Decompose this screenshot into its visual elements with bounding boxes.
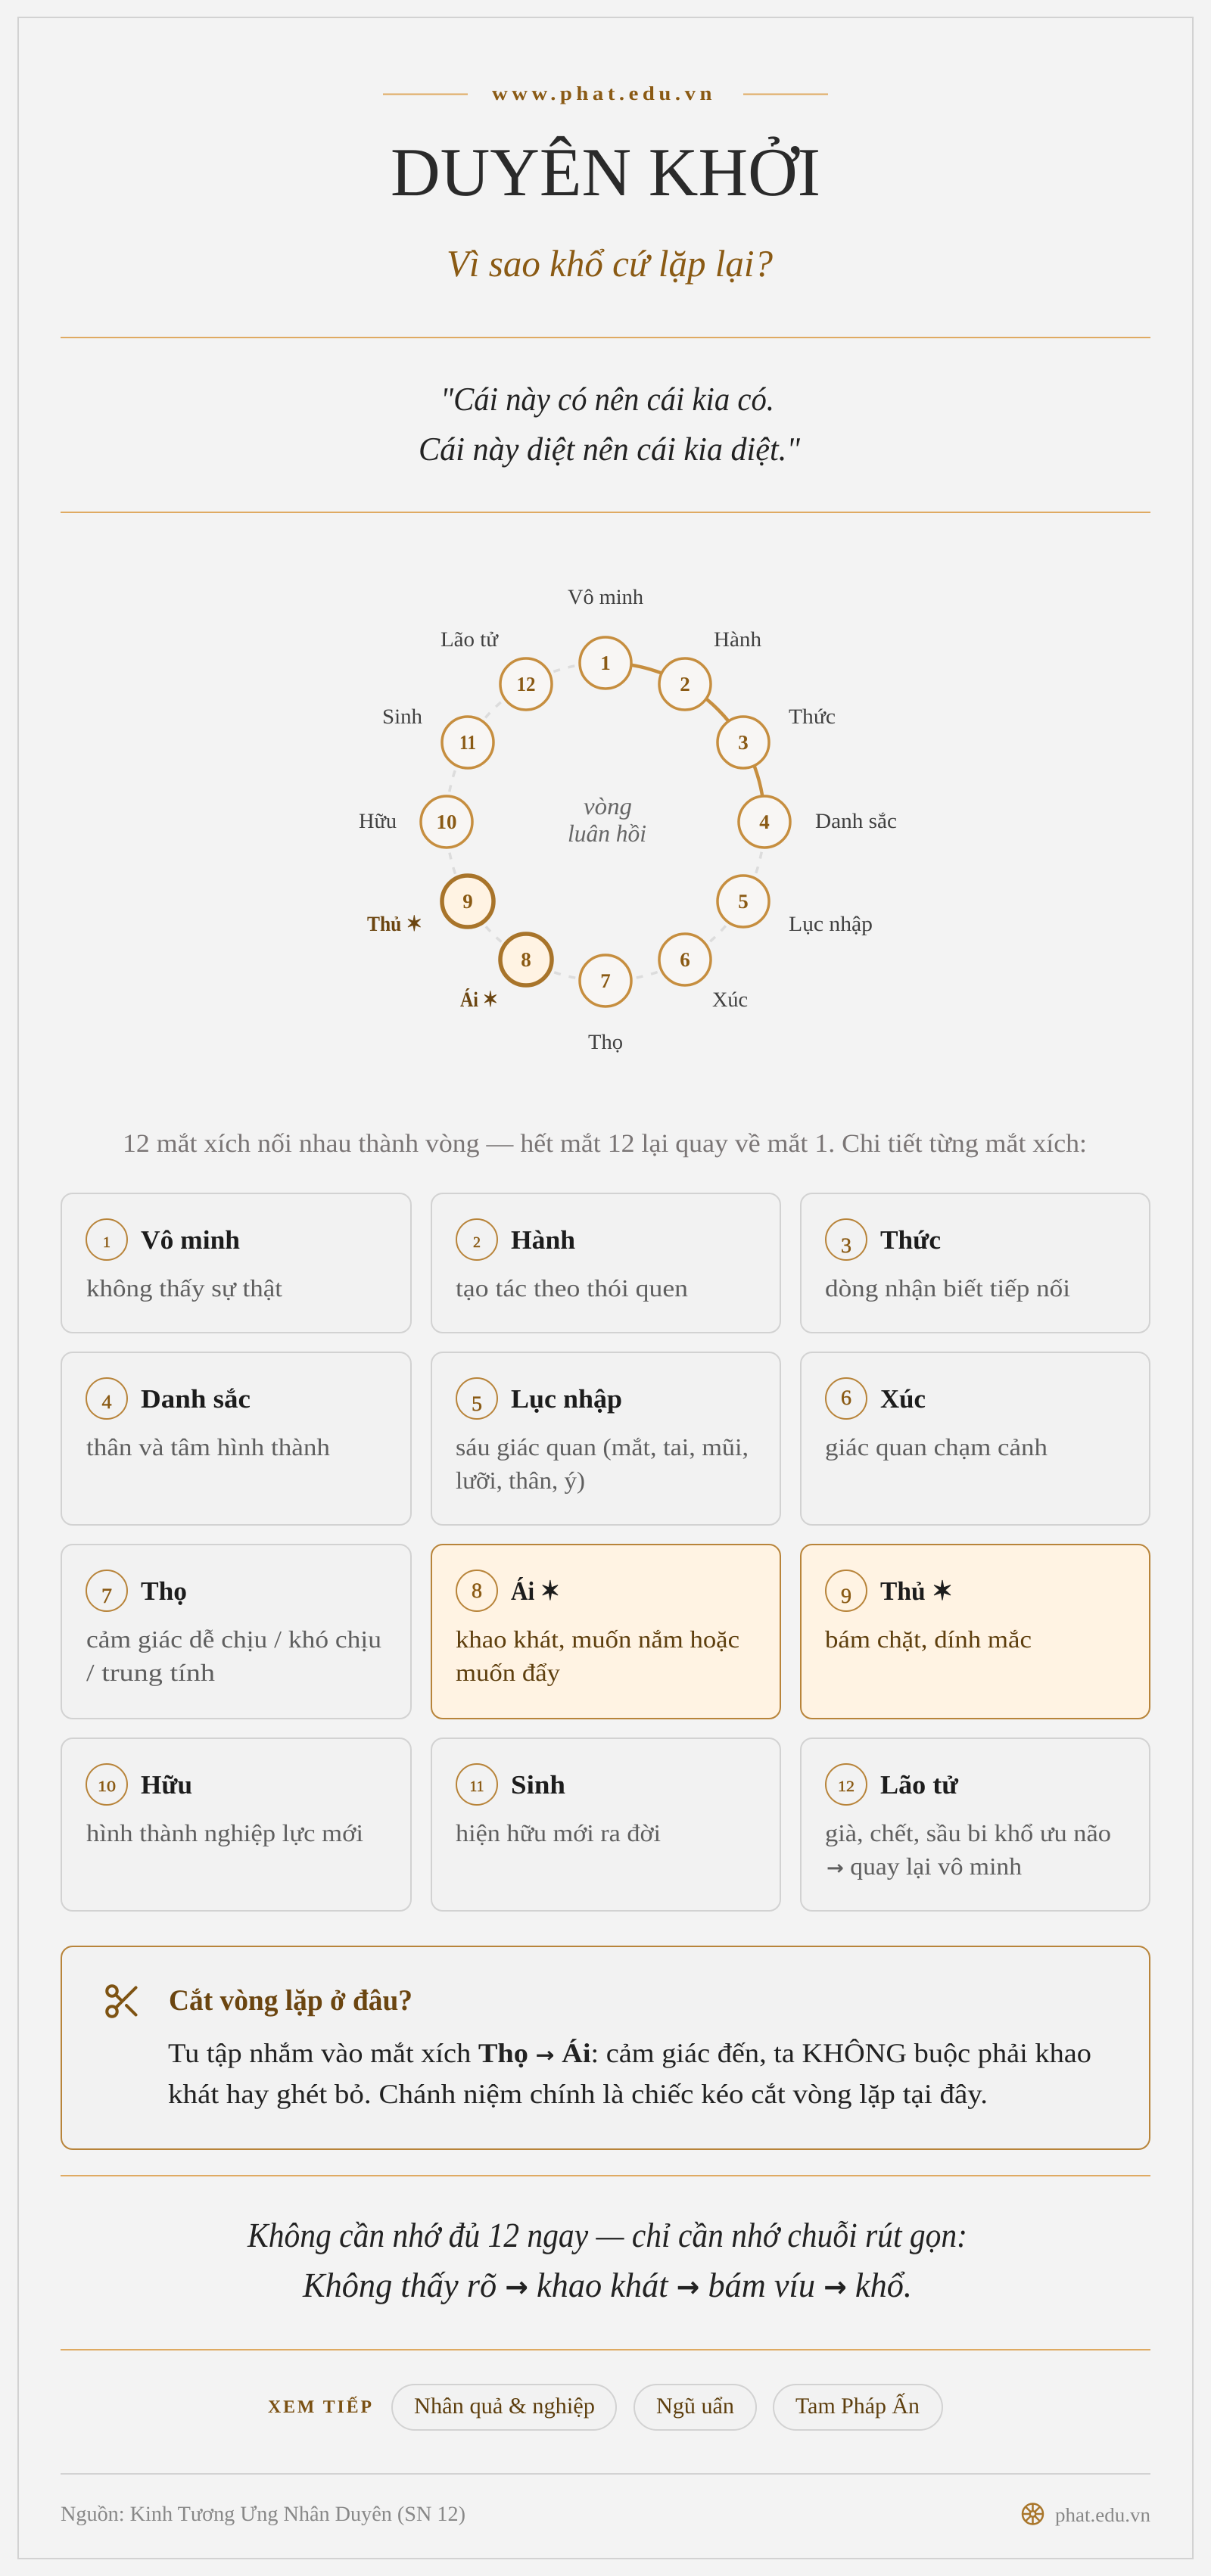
node 8 highlighted bbox=[500, 934, 552, 985]
node 2 bbox=[659, 658, 711, 710]
badge 10: 10 bbox=[98, 1778, 116, 1795]
callout body: khát hay ghét bỏ. Chánh niệm chính là chiếc kéo cắt vòng lặp tại đây. bbox=[168, 2079, 988, 2109]
source: Nguồn: Kinh Tương Ưng Nhân Duyên (SN 12) bbox=[61, 2503, 465, 2526]
label: Danh sắc: Danh sắc bbox=[815, 810, 897, 833]
card 7 description bbox=[86, 1626, 381, 1686]
pill: Tam Pháp Ấn: Tam Pháp Ấn bbox=[795, 2393, 920, 2419]
node 6 bbox=[659, 934, 711, 985]
card 11 bbox=[431, 1738, 780, 1911]
node 11: 11 bbox=[459, 731, 476, 754]
quote: "Cái này có nên cái kia có. bbox=[441, 381, 774, 418]
badge 2: 2 bbox=[473, 1234, 481, 1251]
callout body bbox=[168, 2038, 1091, 2109]
card 10 description: hình thành nghiệp lực mới bbox=[86, 1819, 363, 1846]
node 3 bbox=[718, 717, 769, 768]
card 4 bbox=[61, 1352, 411, 1525]
card 8 title: Ái ✶ bbox=[511, 1576, 560, 1606]
card 9 highlighted bbox=[801, 1545, 1150, 1719]
card 8 description bbox=[456, 1626, 739, 1686]
card 7 bbox=[61, 1545, 411, 1719]
badge 5: 5 bbox=[472, 1392, 482, 1416]
icon: dharma wheel bbox=[1023, 2503, 1043, 2525]
card 10 title: Hữu bbox=[141, 1770, 192, 1800]
summary: Không thấy rõ → khao khát → bám víu → khổ. bbox=[302, 2266, 912, 2304]
badge 6: 6 bbox=[841, 1386, 851, 1410]
card 6 bbox=[801, 1352, 1150, 1525]
card 10 bbox=[61, 1738, 411, 1911]
card 2 description: tạo tác theo thói quen bbox=[456, 1274, 688, 1302]
card 1 description: không thấy sự thật bbox=[86, 1274, 282, 1302]
card 1 title: Vô minh bbox=[141, 1225, 240, 1255]
card 11 title: Sinh bbox=[511, 1770, 565, 1800]
node 3: 3 bbox=[738, 731, 749, 754]
node 12: 12 bbox=[516, 673, 536, 695]
card 9 description: bám chặt, dính mắc bbox=[825, 1626, 1032, 1653]
card 6 description: giác quan chạm cảnh bbox=[825, 1433, 1048, 1461]
card 8 description: muốn đẩy bbox=[456, 1659, 560, 1686]
badge 1: 1 bbox=[103, 1234, 111, 1251]
ring centre text: vòng bbox=[584, 792, 632, 820]
badge 7: 7 bbox=[101, 1585, 112, 1608]
node 1 bbox=[580, 637, 631, 689]
callout heading: Cắt vòng lặp ở đâu? bbox=[169, 1984, 412, 2017]
node 10 bbox=[421, 796, 472, 848]
badge 3 bbox=[826, 1219, 867, 1260]
card 3 title: Thức bbox=[880, 1225, 941, 1255]
badge 9: 9 bbox=[841, 1585, 851, 1608]
label: Hành: Hành bbox=[714, 628, 761, 652]
pill: Nhân quả & nghiệp bbox=[392, 2385, 616, 2430]
pill: Ngũ uẩn bbox=[634, 2385, 756, 2430]
card 4 description: thân và tâm hình thành bbox=[86, 1433, 330, 1461]
quote: Cái này diệt nên cái kia diệt." bbox=[419, 431, 800, 468]
badge 4: 4 bbox=[101, 1391, 112, 1413]
card 7 description: / trung tính bbox=[86, 1659, 215, 1686]
card 9 title: Thủ ✶ bbox=[880, 1576, 953, 1606]
badge 4 bbox=[86, 1378, 127, 1419]
label: Ái: Ái ✶ bbox=[460, 988, 498, 1012]
card 12 bbox=[801, 1738, 1150, 1911]
callout body: Tu tập nhắm vào mắt xích Thọ → Ái: cảm giác đến, ta KHÔNG buộc phải khao bbox=[168, 2038, 1091, 2068]
card 8 highlighted bbox=[431, 1545, 780, 1719]
badge 7 bbox=[86, 1570, 127, 1611]
card 5 title: Lục nhập bbox=[511, 1384, 622, 1414]
card 5 description bbox=[456, 1433, 749, 1494]
label: Thủ: Thủ ✶ bbox=[367, 913, 422, 936]
node 8 highlighted: 8 bbox=[521, 948, 531, 971]
ring centre text bbox=[568, 792, 646, 847]
callout bbox=[61, 1946, 1150, 2149]
label: Thức: Thức bbox=[789, 705, 836, 729]
pill: Nhân quả & nghiệp: Nhân quả & nghiệp bbox=[414, 2394, 595, 2419]
label: Thọ: Thọ bbox=[588, 1031, 623, 1054]
card 12 description bbox=[825, 1819, 1111, 1880]
node 5: 5 bbox=[738, 890, 749, 913]
badge 2 bbox=[456, 1219, 497, 1260]
summary: Không cần nhớ đủ 12 ngay — chỉ cần nhớ chuỗi rút gọn: bbox=[247, 2216, 967, 2254]
ring diagram bbox=[359, 586, 897, 1054]
node 12 bbox=[500, 658, 552, 710]
card 12 title: Lão tử bbox=[880, 1770, 959, 1800]
card 12 description: → quay lại vô minh bbox=[827, 1853, 1022, 1880]
card 7 description: cảm giác dễ chịu / khó chịu bbox=[86, 1626, 381, 1653]
badge 10 bbox=[86, 1764, 127, 1805]
badge 1 bbox=[86, 1219, 127, 1260]
label: Vô minh: Vô minh bbox=[568, 586, 643, 609]
label: Xúc: Xúc bbox=[712, 988, 748, 1012]
label: Lục nhập: Lục nhập bbox=[789, 913, 873, 936]
footer site: phat.edu.vn bbox=[1055, 2504, 1150, 2526]
card 11 description: hiện hữu mới ra đời bbox=[456, 1819, 661, 1846]
card 12 description: già, chết, sầu bi khổ ưu não bbox=[825, 1819, 1111, 1846]
badge 9 bbox=[826, 1570, 867, 1611]
node 4 bbox=[739, 796, 790, 848]
card 1 bbox=[61, 1193, 411, 1333]
title: DUYÊN KHỞI bbox=[391, 134, 820, 210]
intro line: 12 mắt xích nối nhau thành vòng — hết mắt 12 lại quay về mắt 1. Chi tiết từng mắt xích: bbox=[123, 1130, 1087, 1158]
badge 8: 8 bbox=[472, 1579, 482, 1603]
icon: scissors bbox=[107, 1986, 136, 2017]
card 2 bbox=[431, 1193, 780, 1333]
see more row bbox=[268, 2385, 942, 2430]
node 5 bbox=[718, 876, 769, 927]
pill: Tam Pháp Ấn bbox=[774, 2385, 942, 2430]
node 9 highlighted: 9 bbox=[462, 890, 473, 913]
card 2 title: Hành bbox=[511, 1225, 575, 1255]
card 5 bbox=[431, 1352, 780, 1525]
node 1: 1 bbox=[600, 652, 611, 674]
badge 8 bbox=[456, 1570, 497, 1611]
card 6 title: Xúc bbox=[880, 1384, 926, 1414]
card 3 bbox=[801, 1193, 1150, 1333]
summary bbox=[247, 2216, 967, 2304]
node 7 bbox=[580, 955, 631, 1006]
node 11 bbox=[442, 717, 493, 768]
label: Sinh: Sinh bbox=[382, 705, 422, 729]
label: Hữu: Hữu bbox=[359, 810, 397, 833]
badge 3: 3 bbox=[841, 1234, 851, 1258]
card 5 description: sáu giác quan (mắt, tai, mũi, bbox=[456, 1433, 749, 1461]
badge 11 bbox=[456, 1764, 497, 1805]
badge 5 bbox=[456, 1378, 497, 1419]
node 2: 2 bbox=[680, 673, 690, 695]
node 7: 7 bbox=[600, 969, 611, 992]
badge 12: 12 bbox=[838, 1778, 855, 1795]
label: Lão tử: Lão tử bbox=[441, 628, 499, 652]
site label: www.phat.edu.vn bbox=[492, 82, 716, 104]
node 6: 6 bbox=[680, 948, 690, 971]
see more label: XEM TIẾP bbox=[268, 2396, 374, 2417]
badge 12 bbox=[826, 1764, 867, 1805]
badge 11: 11 bbox=[469, 1778, 484, 1795]
card 8 description: khao khát, muốn nắm hoặc bbox=[456, 1626, 739, 1653]
card 7 title: Thọ bbox=[141, 1576, 187, 1606]
node 4: 4 bbox=[759, 810, 770, 833]
pill: Ngũ uẩn: Ngũ uẩn bbox=[656, 2394, 734, 2419]
ring centre text: luân hồi bbox=[568, 820, 646, 847]
card 4 title: Danh sắc bbox=[141, 1384, 251, 1414]
subtitle: Vì sao khổ cứ lặp lại? bbox=[447, 242, 773, 285]
highlighted arc 1 to 4 bbox=[606, 663, 764, 822]
card 5 description: lưỡi, thân, ý) bbox=[456, 1467, 585, 1494]
badge 6 bbox=[826, 1378, 867, 1419]
node 10: 10 bbox=[436, 810, 457, 833]
quote bbox=[419, 381, 800, 468]
node 9 highlighted bbox=[442, 876, 493, 927]
card 3 description: dòng nhận biết tiếp nối bbox=[825, 1274, 1070, 1302]
